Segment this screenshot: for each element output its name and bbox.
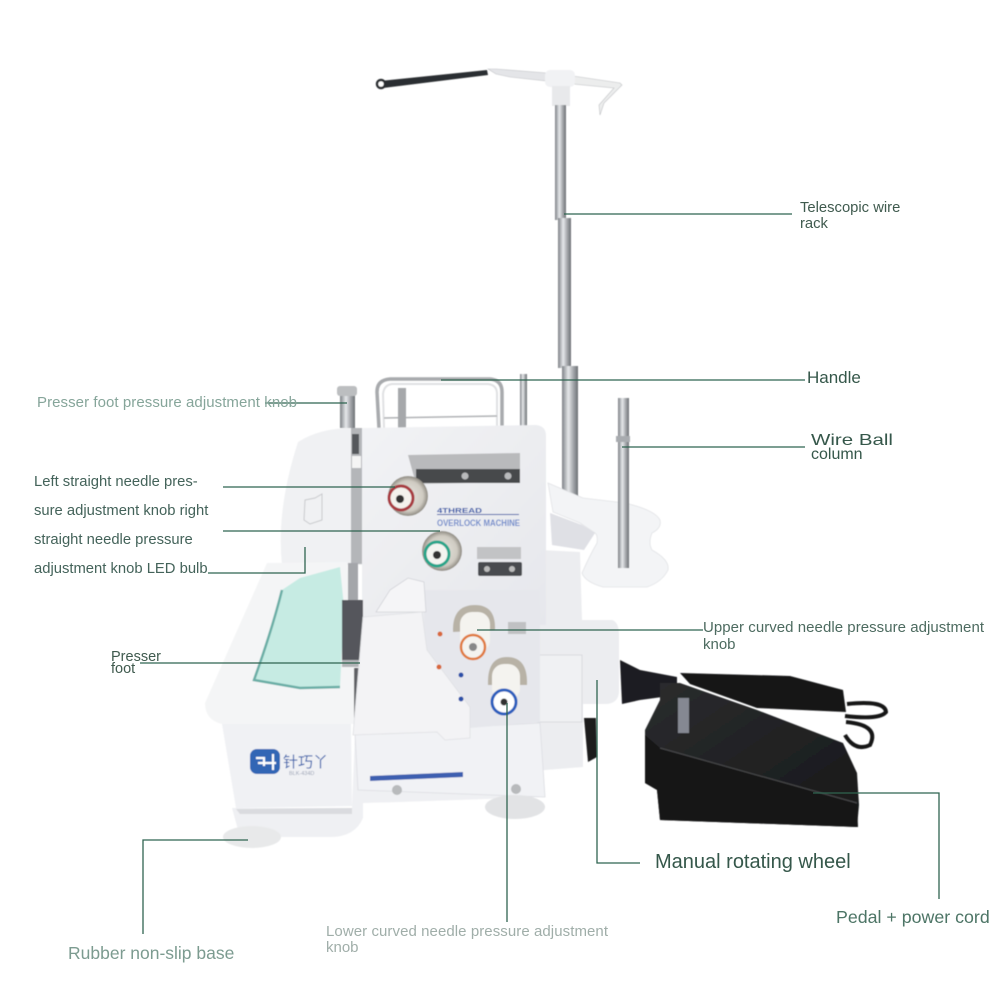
- thread guide bracket lower: [477, 547, 522, 576]
- icon: foot pedal and power cord: [584, 660, 886, 827]
- label: lower curved needle knob second line: knob: [326, 939, 359, 956]
- lower base block: [232, 723, 545, 837]
- label: pedal and power cord: Pedal + power cord: [836, 907, 990, 927]
- label: telescopic wire rack: rack: [800, 216, 829, 232]
- label: rubber non-slip base: Rubber non-slip base: [68, 943, 234, 963]
- label: presser foot pressure knob: Presser foot pressure adjustment knob: [37, 394, 297, 411]
- presser knob column: [340, 392, 355, 428]
- upper body: [362, 425, 546, 625]
- icon: wire ball column: [520, 374, 630, 568]
- tension knob: orange: [453, 605, 495, 659]
- screws: [392, 784, 521, 795]
- label: upper curved needle knob second line: knob: [703, 636, 736, 653]
- icon: overlock machine body: 针巧丫: [283, 754, 328, 771]
- inner looper area: [424, 590, 540, 728]
- machine handle: [377, 379, 502, 428]
- fabric: [254, 567, 344, 688]
- label: presser foot: foot: [111, 661, 135, 677]
- thread guide bracket upper: [408, 453, 520, 484]
- label: handle: Handle: [807, 368, 861, 387]
- label: presser foot: Presser: [111, 649, 161, 665]
- left bed top: [205, 562, 358, 724]
- icon: thread stand base: [548, 483, 668, 587]
- looper cover: [353, 612, 470, 740]
- left bed front: [222, 724, 352, 808]
- label: straight needle knobs and LED bulb: adjustment knob LED bulb: [34, 561, 208, 577]
- needle column and foot: [351, 428, 362, 564]
- bottom label strip: [370, 772, 463, 781]
- tension knob: blue: [488, 657, 527, 714]
- model label: 4THREAD: [437, 508, 482, 515]
- icon: overlock machine body: BLK-434D: [289, 771, 314, 777]
- tension knob: red: [388, 476, 428, 516]
- icon: telescopic thread rack: [377, 69, 622, 506]
- colored dots: [436, 632, 464, 702]
- label: wire ball column second line: column: [811, 446, 863, 463]
- tension knob: green: [422, 531, 462, 571]
- top cover: [376, 578, 426, 612]
- left head: [281, 428, 362, 565]
- label: lower curved needle knob: Lower curved needle pressure adjustment: [326, 923, 609, 940]
- icon: overlock machine body: [205, 379, 619, 848]
- label: straight needle knobs and LED bulb: sure adjustment knob right: [34, 503, 208, 519]
- leader lines: [140, 214, 939, 934]
- label: straight needle knobs and LED bulb: straight needle pressure: [34, 532, 193, 548]
- small guide: [508, 622, 526, 634]
- logo badge: [250, 749, 280, 774]
- right side housing: [400, 550, 619, 790]
- icon: overlock machine body: OVERLOCK MACHINE: [437, 518, 520, 528]
- label: telescopic wire rack: Telescopic wire: [800, 200, 900, 216]
- rubber feet: [223, 826, 281, 848]
- label: straight needle knobs and LED bulb: Left straight needle pres-: [34, 474, 198, 490]
- label: wire ball column: Wire Ball: [811, 432, 893, 449]
- label: manual rotating wheel: Manual rotating wheel: [655, 851, 851, 873]
- label: upper curved needle knob: Upper curved needle pressure adjustment: [703, 619, 985, 636]
